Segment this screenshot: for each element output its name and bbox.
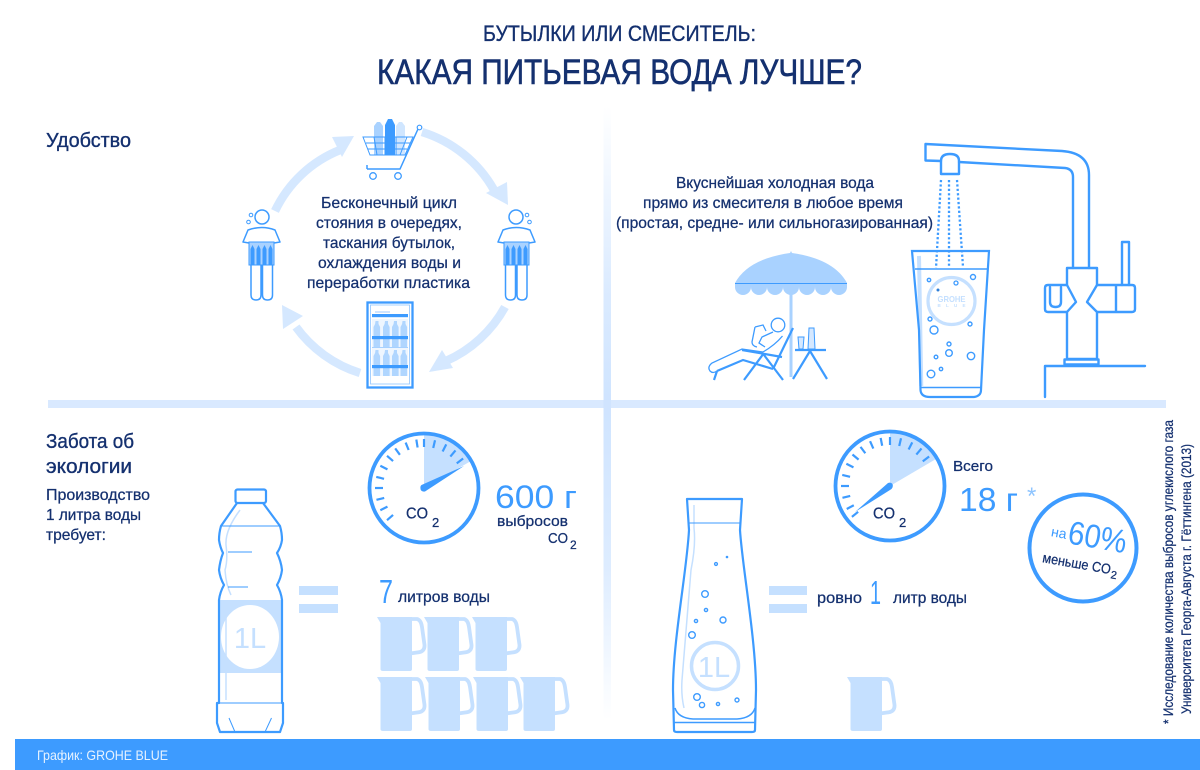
footnote	[1161, 420, 1194, 724]
icon: carafe	[673, 499, 756, 732]
gauge: 18 g CO2	[836, 432, 944, 540]
stat: 7 liters of water: литров воды	[398, 589, 490, 606]
icon: person carrying bottles right	[498, 210, 535, 300]
badge: 60 percent less CO2: 2	[1110, 569, 1118, 582]
badge: 60 percent less CO2: меньше CO	[1041, 549, 1112, 577]
heading: ecology: Забота об	[46, 431, 134, 453]
cycle text: стояния в очередях,	[316, 215, 462, 232]
stat: 7 liters of water: 7	[379, 573, 393, 610]
stat: 7 liters of water	[379, 573, 490, 610]
cycle text: переработки пластика	[307, 275, 470, 292]
panel: bottle cycle	[243, 119, 535, 388]
gauge: 18 g CO2: 2	[899, 515, 906, 530]
cycle text: Бесконечный цикл	[321, 195, 457, 212]
title: БУТЫЛКИ ИЛИ СМЕСИТЕЛЬ:	[483, 21, 756, 46]
footer bar: График: GROHE BLUE	[37, 747, 168, 763]
water streams	[936, 180, 963, 268]
badge: 60 percent less CO2: 60%	[1065, 514, 1130, 560]
title: КАКАЯ ПИТЬЕВАЯ ВОДА ЛУЧШЕ?	[377, 53, 862, 92]
footnote: * Исследование количества выбросов углекислого газа	[1161, 420, 1176, 724]
footnote: Университета Георга-Августа г. Гёттингена (2013)	[1179, 444, 1194, 714]
icon: glass of water: GROHE	[938, 294, 966, 304]
icon: faucet	[926, 144, 1145, 397]
icon: glass of water	[912, 251, 989, 397]
stat: exactly 1 liter: литр воды	[893, 590, 967, 607]
icon: plastic bottle	[217, 490, 283, 732]
faucet text: Вкуснейшая холодная вода	[676, 175, 874, 192]
title	[377, 21, 862, 92]
faucet text: прямо из смесителя в любое время	[643, 195, 903, 212]
text block: production requires: требует:	[46, 527, 106, 544]
equals sign right	[769, 586, 807, 613]
heading: ecology	[46, 431, 134, 478]
faucet text: (простая, средне- или сильногазированная)	[616, 215, 933, 232]
icon: single jug	[847, 677, 895, 731]
gauge: 18 g CO2: CO	[873, 506, 895, 522]
stat: exactly 1 liter	[817, 574, 967, 611]
panel: faucet convenience	[616, 144, 1145, 397]
cycle text	[307, 195, 470, 292]
stat: 600 g: 600 г	[495, 479, 577, 515]
cycle text: таскания бутылок,	[323, 235, 455, 252]
stat: 600 g: 2	[570, 538, 577, 552]
equals sign left	[299, 586, 338, 613]
heading: ecology: экологии	[46, 456, 132, 478]
icon: plastic bottle: 1L	[234, 623, 266, 655]
stat: total 18 g: 18 г	[959, 481, 1018, 518]
cycle arrows	[275, 132, 508, 373]
vertical divider	[604, 106, 611, 720]
gauge: 600 g CO2: CO	[406, 506, 428, 522]
heading: convenience: Удобство	[46, 130, 131, 152]
icon: fridge	[368, 302, 412, 388]
stat: 600 g	[495, 479, 577, 552]
icon: person carrying bottles left	[243, 210, 280, 300]
icon: shopping cart	[363, 119, 422, 179]
badge: 60 percent less CO2: на	[1050, 523, 1068, 542]
stat: exactly 1 liter: 1	[870, 574, 881, 611]
text block: production requires: Производство	[46, 487, 150, 504]
stat: exactly 1 liter: ровно	[817, 590, 862, 607]
stat: total 18 g: *	[1027, 483, 1036, 510]
icon: umbrella and lounger	[709, 251, 847, 380]
horizontal divider	[48, 400, 1166, 408]
gauge: 600 g CO2: 2	[432, 515, 439, 530]
stat: total 18 g: Всего	[953, 458, 993, 475]
stat: 600 g: CO	[548, 530, 568, 547]
footer bar	[15, 739, 1200, 770]
text block: production requires: 1 литра воды	[46, 507, 141, 524]
stat: total 18 g	[953, 458, 1036, 518]
gauge: 600 g CO2	[370, 434, 478, 542]
text block: production requires	[46, 487, 150, 544]
cycle text: охлаждения воды и	[318, 255, 461, 272]
faucet text	[616, 175, 933, 232]
icons: seven water jugs	[377, 617, 568, 731]
stat: 600 g: выбросов	[497, 513, 568, 530]
icon: carafe: 1L	[698, 652, 730, 684]
badge: 60 percent less CO2	[1030, 494, 1136, 602]
icon: glass of water: BLUE	[938, 303, 966, 308]
